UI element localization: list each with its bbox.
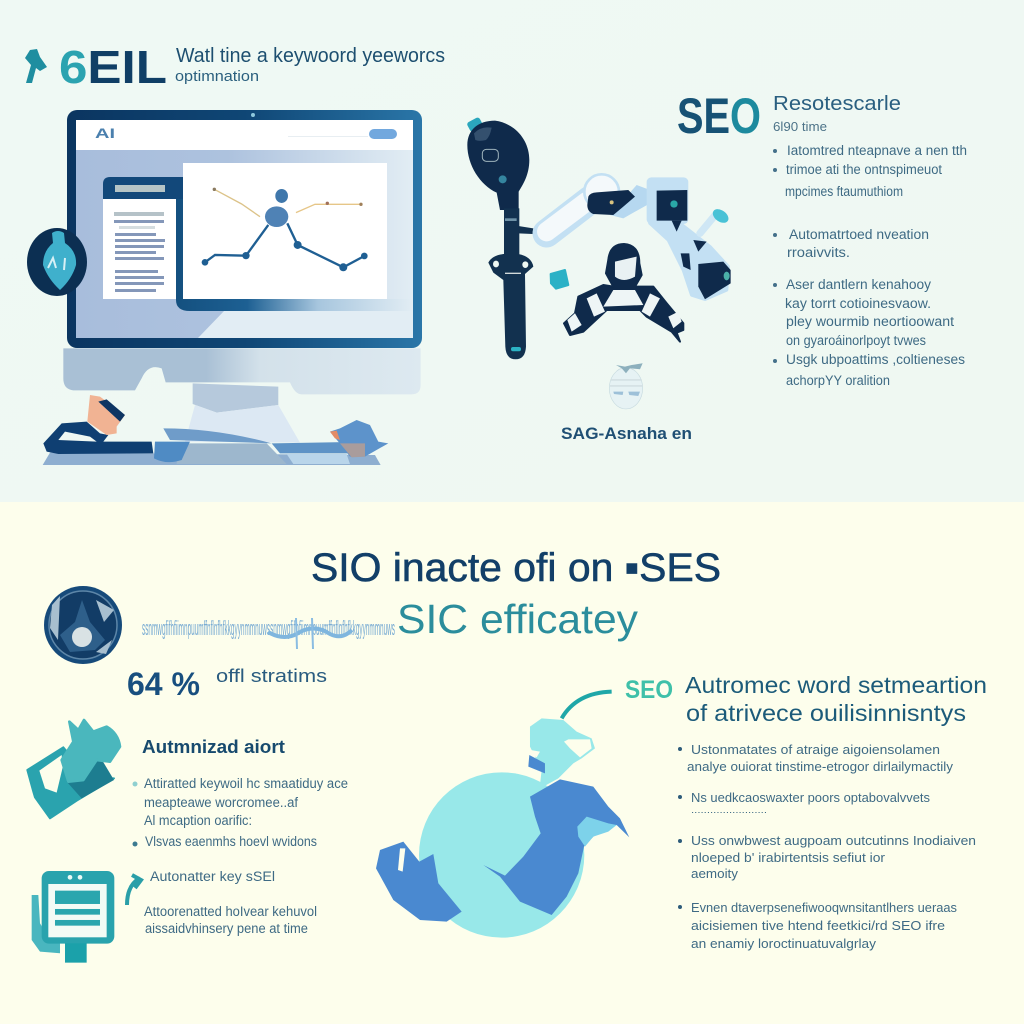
bullet list bbox=[678, 742, 976, 951]
text block: automater: Attoorenatted hoIvear kehuvol bbox=[144, 904, 317, 919]
bullet list bbox=[773, 143, 967, 388]
text block: automater: aissaidvhinsery pene at time bbox=[145, 921, 308, 936]
subheading: Resotescarle bbox=[773, 93, 901, 115]
text block: automized: Attiratted keywoil hc smaatiduy ace bbox=[144, 776, 348, 791]
heading line 2: of atrivece ouilisinnisntys bbox=[686, 700, 966, 726]
bullet list: pley wourmib neortioowant bbox=[786, 314, 954, 329]
panel: bottom section background bbox=[0, 502, 1024, 1024]
screen bbox=[76, 120, 413, 338]
text block: automater: Autonatter key sSEl bbox=[150, 869, 275, 884]
icon: dark globe badge bbox=[44, 586, 122, 664]
panel: top section background bbox=[0, 0, 1024, 502]
statistic label: offl stratims bbox=[216, 666, 327, 686]
continents bbox=[376, 779, 629, 922]
bullet list: Aser dantlern kenahooy bbox=[786, 277, 931, 292]
panel: right automation text bbox=[625, 672, 987, 951]
bullet list: Uss onwbwest augpoam outcutinns Inodiaiven bbox=[691, 833, 976, 848]
text block: automized: Al mcaption oarific: bbox=[144, 813, 252, 828]
text block: automater bbox=[144, 869, 317, 936]
icon: teal document tablet bbox=[32, 871, 114, 963]
bullet list: Iatomtred nteapnave a nen tth bbox=[787, 143, 967, 158]
line chart bbox=[183, 163, 387, 299]
globe circle bbox=[419, 772, 584, 938]
small label: 6l90 time bbox=[773, 119, 827, 134]
bullet list: achorpYY oralition bbox=[786, 373, 890, 388]
text block: automized bbox=[132, 737, 348, 849]
bullet list: analye ouiorat tinstime-etrogor dirlailymactily bbox=[687, 759, 954, 774]
heading: bottom section title: SIO inacte ofi on ▪SES bbox=[311, 546, 721, 590]
chart backing strip bbox=[176, 177, 413, 311]
bullet list: Automatrtoed nveation bbox=[789, 227, 929, 242]
title line 1: Watl tine a keywoord yeeworcs bbox=[176, 45, 445, 67]
illustration: robot tool and arm bbox=[466, 117, 731, 409]
bullet list: kay torrt cotioinesvaow. bbox=[785, 296, 931, 311]
icon: teal figure bbox=[25, 49, 47, 83]
text block: automized: Vlsvas eaenmhs hoevl wvidons bbox=[145, 834, 317, 849]
icon: teal thumbs card bbox=[27, 720, 120, 818]
arrow: teal curved bbox=[127, 875, 141, 905]
tool handle bbox=[466, 117, 533, 359]
text block: automized: meapteawe worcromee..af bbox=[144, 795, 298, 810]
icon: teal cube bbox=[551, 270, 568, 289]
title line 2: optimnation bbox=[175, 68, 259, 85]
top landmass bbox=[528, 718, 595, 787]
browser toolbar: AI bbox=[95, 125, 115, 141]
monitor bezel and stand bbox=[43, 348, 421, 465]
monitor frame bbox=[67, 110, 422, 348]
camera dot bbox=[251, 113, 255, 117]
bullet list: Usgk ubpoattims ,coltieneses bbox=[786, 352, 965, 367]
SEO teal label: SEO bbox=[625, 676, 673, 704]
heading line 1: Autromec word setmeartion bbox=[685, 672, 987, 698]
bullet list: ........................ bbox=[691, 805, 767, 815]
bullet list: aicisiemen tive htend feetkici/rd SEO ifre bbox=[691, 918, 945, 933]
bullet list: Ustonmatates of atraige aigoiensolamen bbox=[691, 742, 940, 757]
SEO heading: SEO bbox=[677, 88, 761, 144]
statistic: 64%: 64 % bbox=[127, 666, 200, 702]
bullet list: rroaivvits. bbox=[787, 245, 850, 260]
subheading: efficacy: SIC efficatey bbox=[397, 596, 639, 642]
icon: small striped pod bbox=[609, 363, 643, 409]
robot arm bbox=[547, 174, 731, 299]
robot caption: SAG-Asnaha en bbox=[561, 424, 692, 443]
bullet list: on gyaroáinorlpoyt tvwes bbox=[786, 333, 926, 348]
icon: bottle badge bbox=[27, 228, 87, 296]
illustration: desktop monitor bbox=[27, 110, 422, 465]
logo text: 6EIL bbox=[59, 41, 167, 93]
bullet list: Ns uedkcaoswaxter poors optabovalvvets bbox=[691, 790, 930, 805]
bullet list: mpcimes ftaumuthiom bbox=[785, 184, 903, 199]
panel: SEO resources text bbox=[677, 88, 967, 388]
illustration: world globe bbox=[376, 692, 629, 938]
text block: automized: Autmnizad aiort bbox=[142, 737, 285, 757]
header: top logo and title bbox=[25, 41, 445, 93]
document panel bbox=[103, 177, 183, 299]
bullet list: nloeped b' irabirtentsis sefiut ior bbox=[691, 850, 886, 865]
squiggle text line bbox=[142, 618, 395, 649]
infographic canvas: ssnmwgfifhfiimnpuumffnflnfhfkkgyynmmnuwssnmwgfifhfiimnpuumffnflnfhfkkgyynmmnuws bbox=[142, 618, 395, 640]
bullet list: Evnen dtaverpsenefiwooqwnsitantlhers ueraas bbox=[691, 900, 957, 915]
arrow: teal connector bbox=[562, 692, 612, 718]
bullet list: an enamiy loroctinuatuvalgrlay bbox=[691, 936, 877, 951]
screen lower highlight bbox=[198, 310, 413, 338]
bullet list: aemoity bbox=[691, 866, 739, 881]
bullet list: trimoe ati the ontnspimeuot bbox=[786, 162, 942, 177]
browser toolbar bbox=[76, 120, 413, 150]
robot figure bbox=[564, 244, 683, 342]
